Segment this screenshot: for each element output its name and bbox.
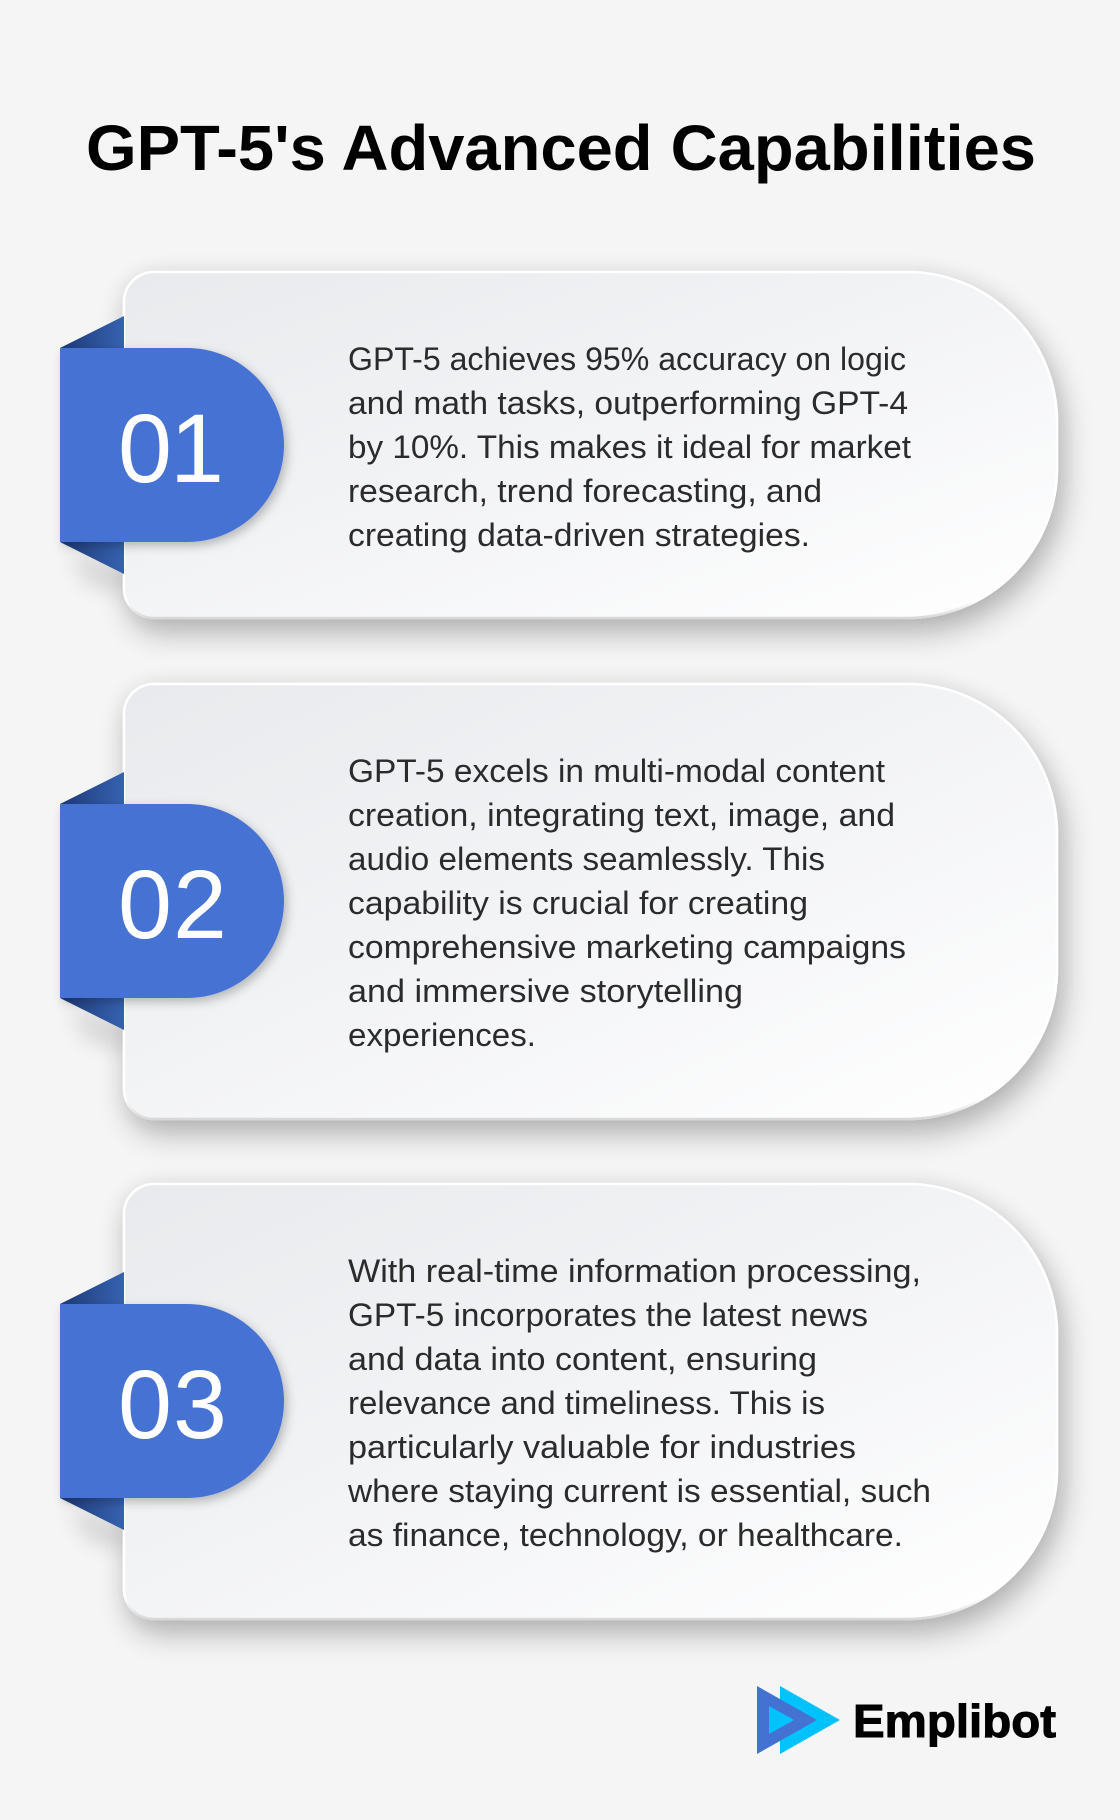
text block 01: creating data-driven strategies. bbox=[348, 517, 810, 553]
text block 02: audio elements seamlessly. This bbox=[348, 841, 825, 877]
text block 03: particularly valuable for industries bbox=[348, 1429, 856, 1465]
text block 02: capability is crucial for creating bbox=[348, 885, 808, 921]
ribbon fold top 03 bbox=[60, 1272, 124, 1304]
text block 02: experiences. bbox=[348, 1017, 536, 1053]
text block 03: as finance, technology, or healthcare. bbox=[348, 1517, 903, 1553]
text block 02: comprehensive marketing campaigns bbox=[348, 929, 906, 965]
text block 03: and data into content, ensuring bbox=[348, 1341, 817, 1377]
number tab 02 bbox=[60, 804, 284, 998]
text block 01: research, trend forecasting, and bbox=[348, 473, 822, 509]
text block 03: GPT-5 incorporates the latest news bbox=[348, 1297, 868, 1333]
text block 01: and math tasks, outperforming GPT-4 bbox=[348, 385, 908, 421]
ribbon fold bottom 03 bbox=[60, 1498, 124, 1530]
text block 01: GPT-5 achieves 95% accuracy on logic bbox=[348, 341, 906, 377]
logo: Emplibot bbox=[757, 1686, 1056, 1754]
number tab 03 bbox=[60, 1304, 284, 1498]
ribbon fold top 01 bbox=[60, 316, 124, 348]
text block 03 bbox=[347, 1253, 931, 1553]
text block 02: and immersive storytelling bbox=[348, 973, 743, 1009]
title: GPT-5's Advanced Capabilities bbox=[86, 112, 1036, 184]
ribbon fold bottom 02 bbox=[60, 998, 124, 1030]
number tab 01 bbox=[60, 348, 284, 542]
text block 02: creation, integrating text, image, and bbox=[348, 797, 895, 833]
panel: step 02 bbox=[60, 684, 1057, 1119]
text block 03: relevance and timeliness. This is bbox=[348, 1385, 825, 1421]
number 01: 01 bbox=[118, 394, 224, 503]
text block 03: With real-time information processing, bbox=[348, 1253, 921, 1289]
panel: step 01 bbox=[60, 272, 1057, 618]
text block 03: where staying current is essential, such bbox=[347, 1473, 931, 1509]
logo wordmark: Emplibot bbox=[853, 1695, 1056, 1747]
card 03 bbox=[124, 1184, 1057, 1619]
ribbon fold top 02 bbox=[60, 772, 124, 804]
text block 02: GPT-5 excels in multi-modal content bbox=[348, 753, 885, 789]
card 02 bbox=[124, 684, 1057, 1119]
panel: step 03 bbox=[60, 1184, 1057, 1619]
text block 01: by 10%. This makes it ideal for market bbox=[348, 429, 911, 465]
number 03: 03 bbox=[118, 1350, 227, 1459]
ribbon fold bottom 01 bbox=[60, 542, 124, 574]
text block 02 bbox=[348, 753, 906, 1053]
number 02: 02 bbox=[118, 850, 227, 959]
icon: play triangles bbox=[757, 1686, 840, 1754]
card 01 bbox=[124, 272, 1057, 618]
text block 01 bbox=[348, 341, 911, 553]
